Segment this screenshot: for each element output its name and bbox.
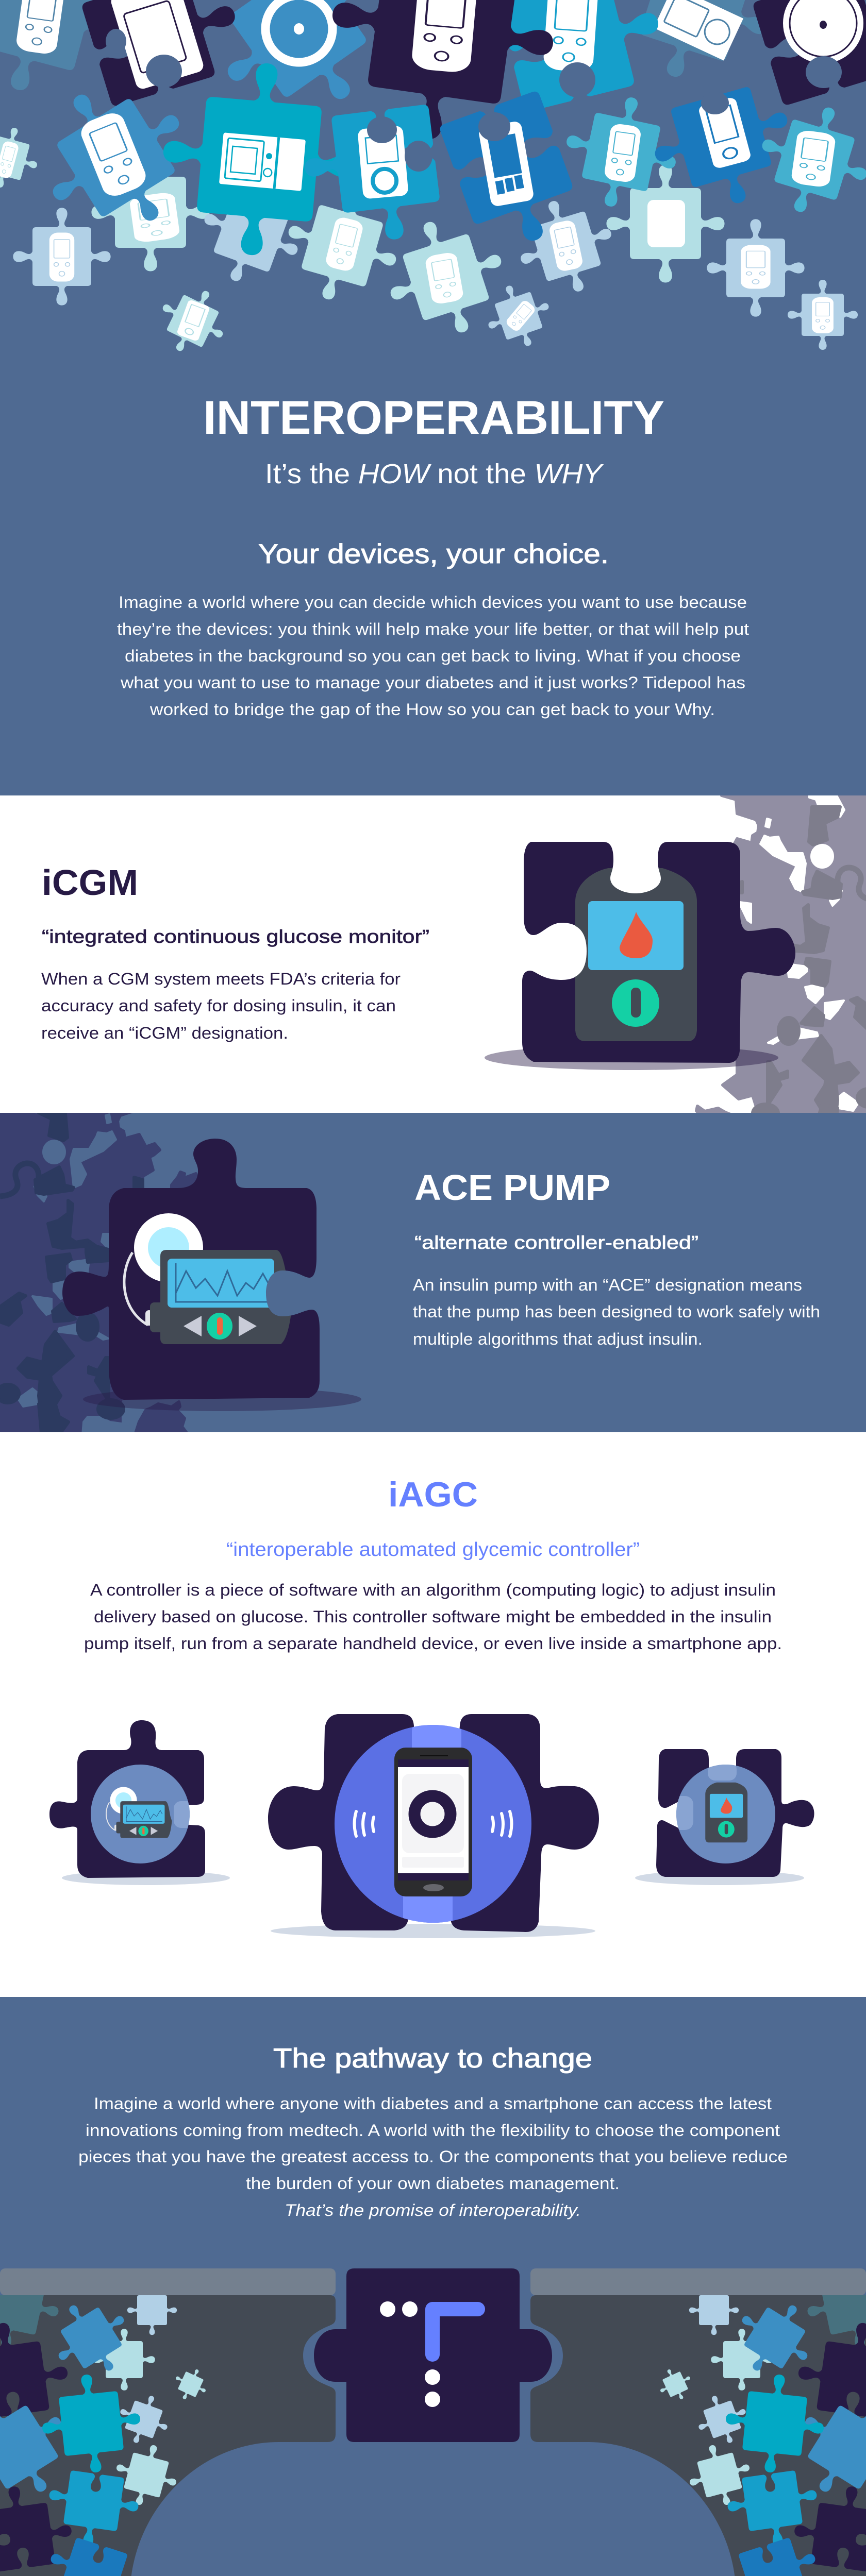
illustration: puzzle bridge left xyxy=(0,2250,336,2576)
subheading: definition: “integrated continuous glucose monitor” xyxy=(42,926,429,947)
keystone with Tidepool mark xyxy=(314,2268,552,2442)
heading: pathway: The pathway to change xyxy=(273,2043,592,2074)
panel: iAGC xyxy=(49,1481,814,1938)
text block: That’s the promise of interoperability. xyxy=(285,2201,581,2219)
shadow xyxy=(485,1045,778,1070)
heading: your devices: Your devices, your choice. xyxy=(258,539,609,569)
icon: iCGM puzzle piece xyxy=(522,842,795,1063)
icon: right CGM piece xyxy=(635,1749,814,1885)
text block: that the pump has been designed to work safely with xyxy=(413,1302,820,1321)
intro text block: worked to bridge the gap of the How so you can get back to your Why. xyxy=(149,700,715,719)
intro text block: they’re the devices: you think will help make your life better, or that will help put xyxy=(117,620,749,638)
text block xyxy=(78,2094,788,2219)
subheading: definition: “interoperable automated glycemic controller” xyxy=(226,1539,640,1561)
intro text block: diabetes in the background so you can get back to living. What if you choose xyxy=(125,647,741,665)
heading: iAGC: iAGC xyxy=(388,1475,478,1514)
text block: multiple algorithms that adjust insulin. xyxy=(413,1330,703,1348)
text block: innovations coming from medtech. A world with the flexibility to choose the component xyxy=(86,2121,780,2140)
text block: When a CGM system meets FDA’s criteria for xyxy=(41,970,401,988)
icon: center phone piece xyxy=(268,1714,599,1938)
text block: pieces that you have the greatest access to. Or the components that you believe reduce xyxy=(78,2147,788,2166)
illustration: puzzle bridge right xyxy=(530,2250,866,2576)
icon: smartphone xyxy=(394,1748,472,1896)
text block: the burden of your own diabetes management. xyxy=(246,2174,620,2193)
text block xyxy=(84,1581,782,1653)
title: INTEROPERABILITY xyxy=(203,392,664,444)
subheading: definition: “alternate controller-enabled” xyxy=(414,1232,698,1253)
panel: hero header xyxy=(0,0,866,795)
text block xyxy=(41,970,401,1042)
heading: iCGM: iCGM xyxy=(42,862,138,903)
text block: receive an “iCGM” designation. xyxy=(41,1024,288,1042)
text block: Imagine a world where anyone with diabetes and a smartphone can access the latest xyxy=(94,2094,772,2113)
text block: delivery based on glucose. This controller software might be embedded in the insulin xyxy=(94,1607,772,1626)
text block: pump itself, run from a separate handheld device, or even live inside a smartphone app. xyxy=(84,1634,782,1653)
puzzle silhouette cluster xyxy=(695,795,866,1113)
icon: CGM device xyxy=(575,868,697,1041)
shadow xyxy=(83,1387,361,1411)
heading: ACE pump: ACE PUMP xyxy=(414,1167,610,1208)
icon: ACE puzzle piece xyxy=(62,1139,322,1400)
subtitle: It’s the HOW not the WHY xyxy=(265,459,604,489)
text block: A controller is a piece of software with an algorithm (computing logic) to adjust insulin xyxy=(90,1581,776,1599)
icon: signal waves xyxy=(355,1811,511,1836)
intro text block: what you want to use to manage your diabetes and it just works? Tidepool has xyxy=(120,673,745,692)
icon: insulin pump xyxy=(124,1213,293,1344)
intro text block xyxy=(117,593,749,719)
panel: pathway to change xyxy=(0,1997,866,2576)
panel: iCGM xyxy=(41,795,866,1113)
panel: ACE pump xyxy=(0,1113,866,1432)
puzzle device collage xyxy=(0,0,866,365)
intro text block: Imagine a world where you can decide which devices you want to use because xyxy=(119,593,747,612)
text block: accuracy and safety for dosing insulin, it can xyxy=(41,996,396,1015)
puzzle silhouette cluster xyxy=(0,1113,198,1432)
icon: left pump piece xyxy=(49,1720,230,1885)
text block xyxy=(413,1276,820,1348)
text block: An insulin pump with an “ACE” designation means xyxy=(413,1276,802,1294)
